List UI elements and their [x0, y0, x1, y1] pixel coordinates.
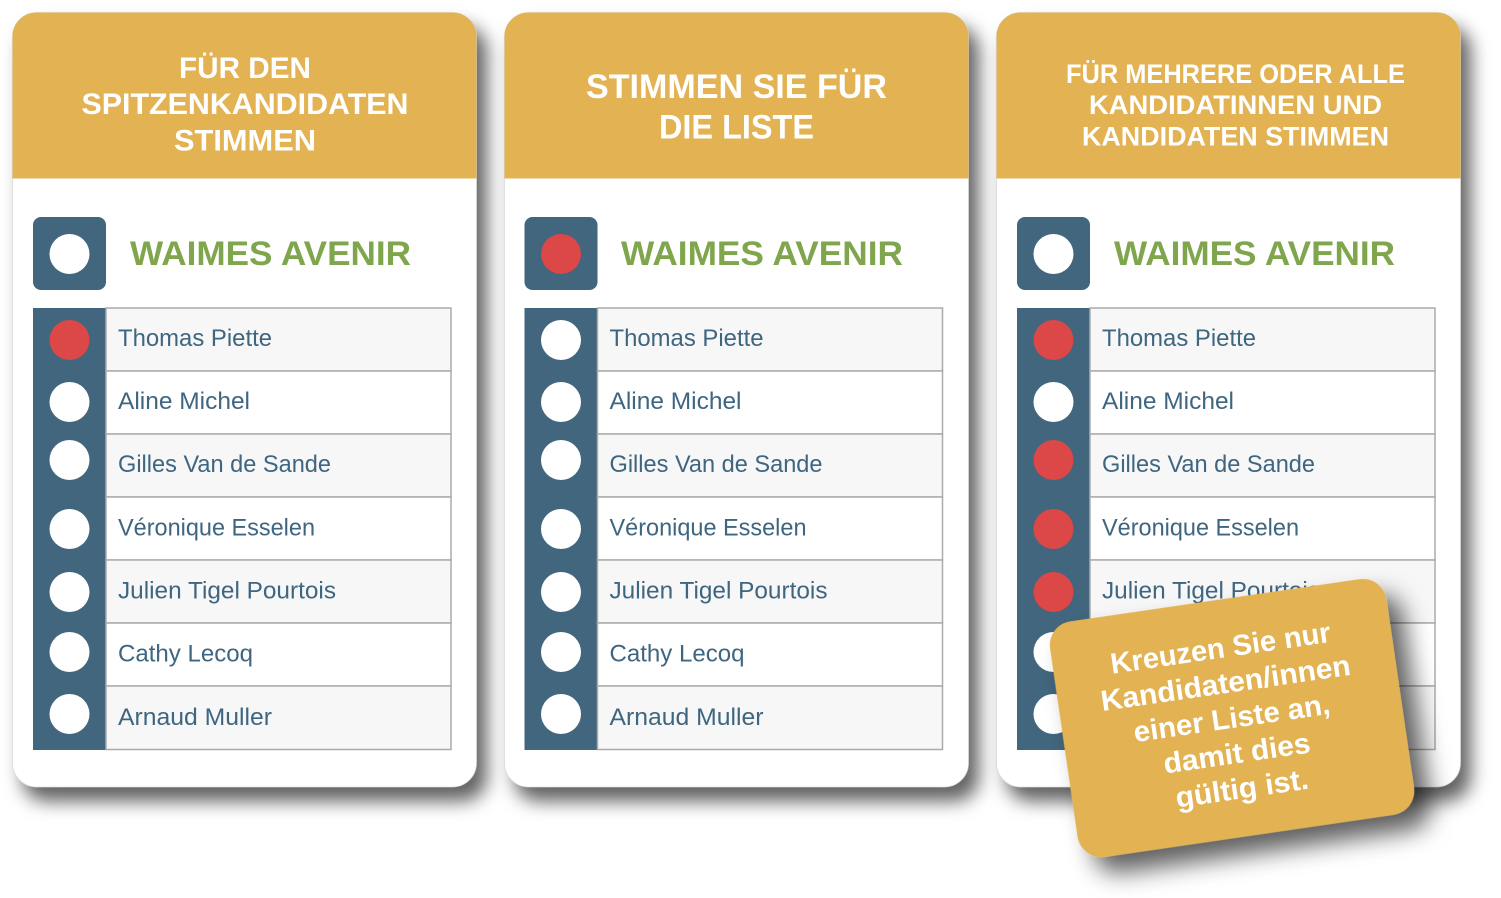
callout: tilted note [1047, 576, 1417, 860]
candidate: Julien Tigel Pourtois [50, 560, 451, 623]
candidate: Thomas Piette, selected [50, 308, 451, 371]
candidate: Thomas Piette: Thomas Piette [610, 325, 764, 352]
list vote box, selected [524, 217, 598, 290]
candidate: Arnaud Muller: Arnaud Muller [118, 704, 272, 731]
heading: DIE LISTE [659, 108, 814, 146]
candidate strip [524, 308, 598, 750]
candidate row, covered by note [1034, 686, 1435, 750]
candidate: Véronique Esselen: Véronique Esselen [610, 514, 806, 542]
callout background [1047, 576, 1417, 860]
candidate: Julien Tigel Pourtois: Julien Tigel Pourtois [610, 578, 828, 604]
callout text: einer Liste an, [1132, 689, 1332, 749]
candidate: Véronique Esselen, selected [1034, 497, 1435, 560]
candidate: Thomas Piette, selected [1034, 308, 1435, 371]
header band [996, 12, 1460, 178]
heading: FÜR DEN [179, 52, 311, 85]
party name: WAIMES AVENIR [130, 235, 411, 273]
heading [82, 52, 408, 158]
candidate row, covered by note [1034, 623, 1435, 686]
heading [586, 68, 887, 146]
party name: WAIMES AVENIR [621, 235, 903, 273]
candidate strip [33, 308, 106, 750]
card background [996, 12, 1460, 787]
candidate: Julien Tigel Pourtois, selected [1034, 560, 1435, 623]
panel: ballot for the list [504, 12, 968, 787]
candidate: Véronique Esselen: Véronique Esselen [118, 514, 315, 542]
candidate: Aline Michel: Aline Michel [1102, 388, 1234, 415]
candidate: Gilles Van de Sande, selected [1034, 434, 1435, 497]
candidate: Véronique Esselen, selected: Véronique Esselen [1102, 514, 1299, 542]
candidate: Aline Michel: Aline Michel [118, 388, 250, 415]
header band [12, 12, 476, 178]
heading: SPITZENKANDIDATEN [82, 88, 408, 121]
candidate: Cathy Lecoq: Cathy Lecoq [118, 640, 253, 668]
card background [12, 12, 476, 787]
list vote box, empty [33, 217, 106, 290]
candidate: Véronique Esselen [50, 497, 451, 560]
candidate: Arnaud Muller: Arnaud Muller [610, 704, 764, 731]
candidate: Gilles Van de Sande: Gilles Van de Sande [610, 451, 822, 478]
header band [504, 12, 968, 178]
candidate: Julien Tigel Pourtois, selected: Julien Tigel Pourtois [1102, 578, 1320, 604]
candidate: Julien Tigel Pourtois: Julien Tigel Pourtois [118, 578, 336, 604]
panel: ballot for the lead candidate [12, 12, 476, 787]
heading: STIMMEN SIE FÜR [586, 68, 887, 106]
candidate: Aline Michel [1034, 371, 1435, 434]
panel: ballot for several candidates [996, 12, 1460, 787]
heading: KANDIDATINNEN UND [1089, 90, 1382, 120]
heading: KANDIDATEN STIMMEN [1082, 122, 1389, 152]
candidate: Arnaud Muller [50, 686, 451, 750]
list vote box, empty [1017, 217, 1090, 290]
candidate: Gilles Van de Sande, selected: Gilles Van de Sande [1102, 451, 1315, 478]
candidate: Thomas Piette, selected: Thomas Piette [118, 325, 272, 352]
candidate: Julien Tigel Pourtois [541, 560, 942, 623]
callout text [1094, 615, 1368, 823]
heading: STIMMEN [174, 124, 316, 158]
callout text: Kreuzen Sie nur [1108, 617, 1333, 681]
callout text: Kandidaten/innen [1099, 650, 1353, 718]
candidate: Cathy Lecoq [50, 623, 451, 686]
candidate: Thomas Piette [541, 308, 942, 371]
candidate: Aline Michel [50, 371, 451, 434]
candidate: Aline Michel [541, 371, 942, 434]
callout text: damit dies [1161, 728, 1312, 781]
heading [1066, 59, 1405, 152]
candidate: Gilles Van de Sande: Gilles Van de Sande [118, 451, 331, 478]
candidate: Véronique Esselen [541, 497, 942, 560]
candidate: Thomas Piette, selected: Thomas Piette [1102, 325, 1256, 352]
candidate: Cathy Lecoq: Cathy Lecoq [610, 640, 744, 668]
candidate: Gilles Van de Sande [50, 434, 451, 497]
callout text: gültig ist. [1173, 764, 1311, 815]
party name: WAIMES AVENIR [1114, 235, 1395, 273]
candidate strip [1017, 308, 1090, 750]
candidate: Aline Michel: Aline Michel [610, 388, 742, 415]
candidate: Arnaud Muller [541, 686, 942, 750]
candidate: Cathy Lecoq [541, 623, 942, 686]
candidate: Gilles Van de Sande [541, 434, 942, 497]
heading: FÜR MEHRERE ODER ALLE [1066, 59, 1405, 89]
card background [504, 12, 968, 787]
